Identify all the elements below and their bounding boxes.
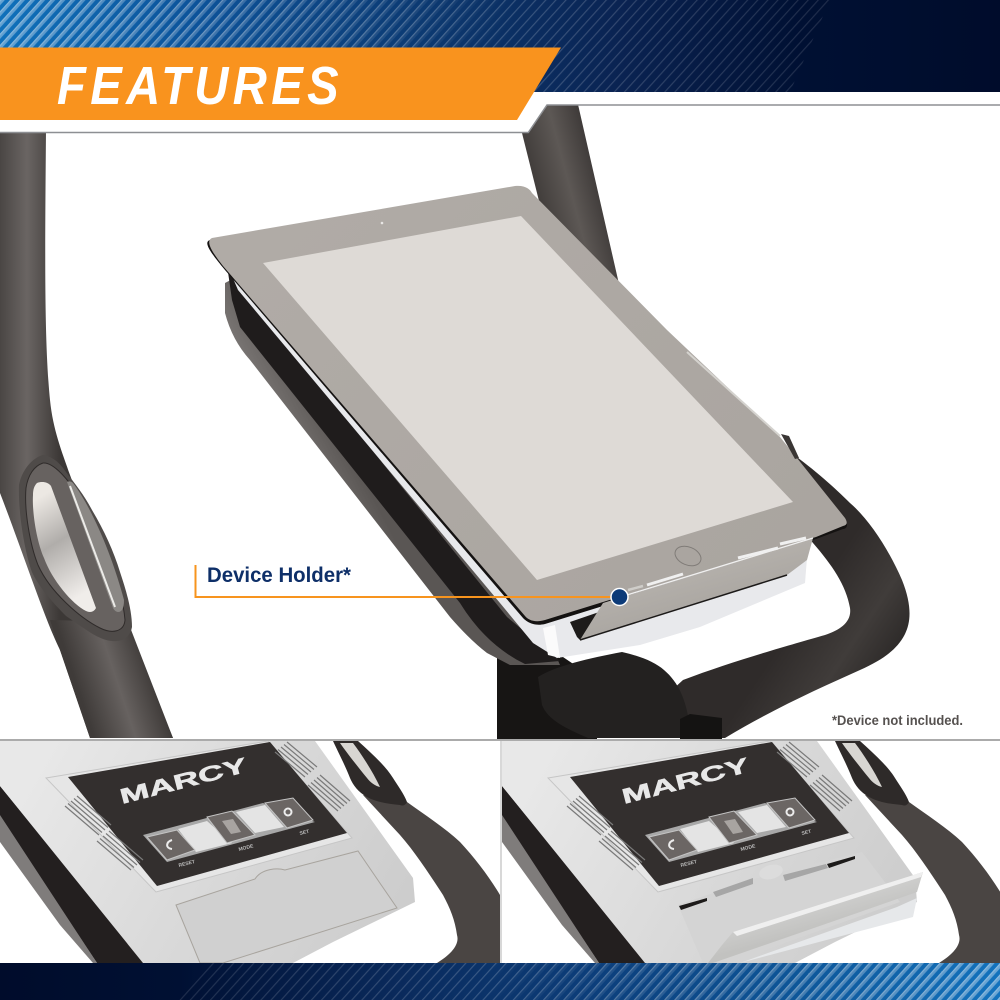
- callout leader line: [196, 565, 619, 597]
- panel: open console view: [502, 741, 1000, 963]
- bottom banner thin stripes: [175, 963, 1000, 1000]
- rear handlebar (closed view): [333, 741, 500, 963]
- inner bevel: [548, 741, 854, 892]
- header band rule right: [528, 105, 1000, 133]
- holder slot shadow bands: [713, 864, 828, 897]
- callout dot: [611, 588, 628, 606]
- stem: [497, 655, 597, 740]
- right curved handlebar: [670, 452, 910, 738]
- holder cavity: [570, 612, 597, 640]
- banner thin stripes: [0, 0, 830, 92]
- brand logo: MARCY: [117, 754, 249, 809]
- panel divider rule: [0, 739, 1000, 741]
- holder recess: [678, 852, 900, 963]
- holder grey underside: [225, 275, 560, 665]
- white header band: [0, 92, 1000, 132]
- silver console body: [502, 741, 917, 963]
- tablet home button: [674, 546, 702, 566]
- small square clamp: [680, 714, 722, 740]
- vertical panel divider: [500, 741, 502, 963]
- rear console post: [522, 100, 619, 284]
- reset button: [147, 830, 195, 860]
- bottom banner wide stripes: [175, 963, 1000, 1000]
- tablet screen: [263, 216, 793, 580]
- speaker grilles: [567, 742, 852, 870]
- holder notch: [758, 862, 784, 882]
- mode label: MODE: [238, 843, 255, 853]
- set button: [767, 798, 815, 828]
- holder flap shadow line: [580, 575, 787, 640]
- tablet body: [207, 186, 847, 625]
- dark lower side: [502, 786, 647, 963]
- mode button: [207, 811, 255, 843]
- reset button: [649, 830, 697, 860]
- display panel: [570, 742, 849, 886]
- holder silver trim and tray: [232, 276, 807, 658]
- main photo: exercise bike console with tablet: [0, 100, 910, 740]
- inner bevel: [46, 741, 352, 892]
- mode label: MODE: [740, 843, 757, 853]
- device holder lid closed: [176, 851, 397, 963]
- panel: closed console view: [0, 741, 500, 963]
- banner wide stripes: [0, 0, 830, 92]
- silver console body: [0, 741, 415, 963]
- set button: [265, 798, 313, 828]
- mode button: [709, 811, 757, 843]
- bottom banner: [0, 963, 1000, 1000]
- left handlebar tube: [0, 130, 173, 738]
- callout: device holder: [196, 563, 628, 606]
- handlebar pulse grip: [19, 455, 132, 641]
- chrome plate left: [33, 482, 96, 612]
- button strip: [645, 803, 817, 862]
- callout label: Device Holder*: [207, 563, 352, 587]
- reset label: RESET: [680, 859, 698, 869]
- set label: SET: [299, 829, 310, 837]
- holder silver corner highlight: [543, 625, 560, 658]
- top banner: [0, 0, 1000, 92]
- tablet camera: [381, 222, 383, 224]
- chrome plate right: [67, 481, 124, 612]
- set label: SET: [801, 829, 812, 837]
- tablet side button: [687, 352, 780, 436]
- holder flap: [580, 538, 813, 640]
- button strip: [143, 803, 315, 862]
- footnote: *Device not included.: [832, 713, 963, 728]
- orange title ribbon: [0, 48, 561, 120]
- rear handlebar (open view): [835, 741, 1000, 963]
- speaker grilles: [65, 742, 350, 870]
- holder flap lip: [627, 538, 813, 595]
- holder black band: [228, 272, 560, 664]
- reset label: RESET: [178, 859, 196, 869]
- device holder open: [678, 852, 923, 963]
- holder slots: [679, 898, 707, 910]
- holder flap: [708, 872, 923, 963]
- header band rule left: [0, 132, 528, 134]
- title: FEATURES: [57, 56, 343, 116]
- dark lower side: [0, 786, 145, 963]
- brand logo: MARCY: [619, 754, 751, 809]
- bracket block: [538, 652, 691, 738]
- holder tray: [740, 898, 917, 963]
- display panel: [68, 742, 347, 886]
